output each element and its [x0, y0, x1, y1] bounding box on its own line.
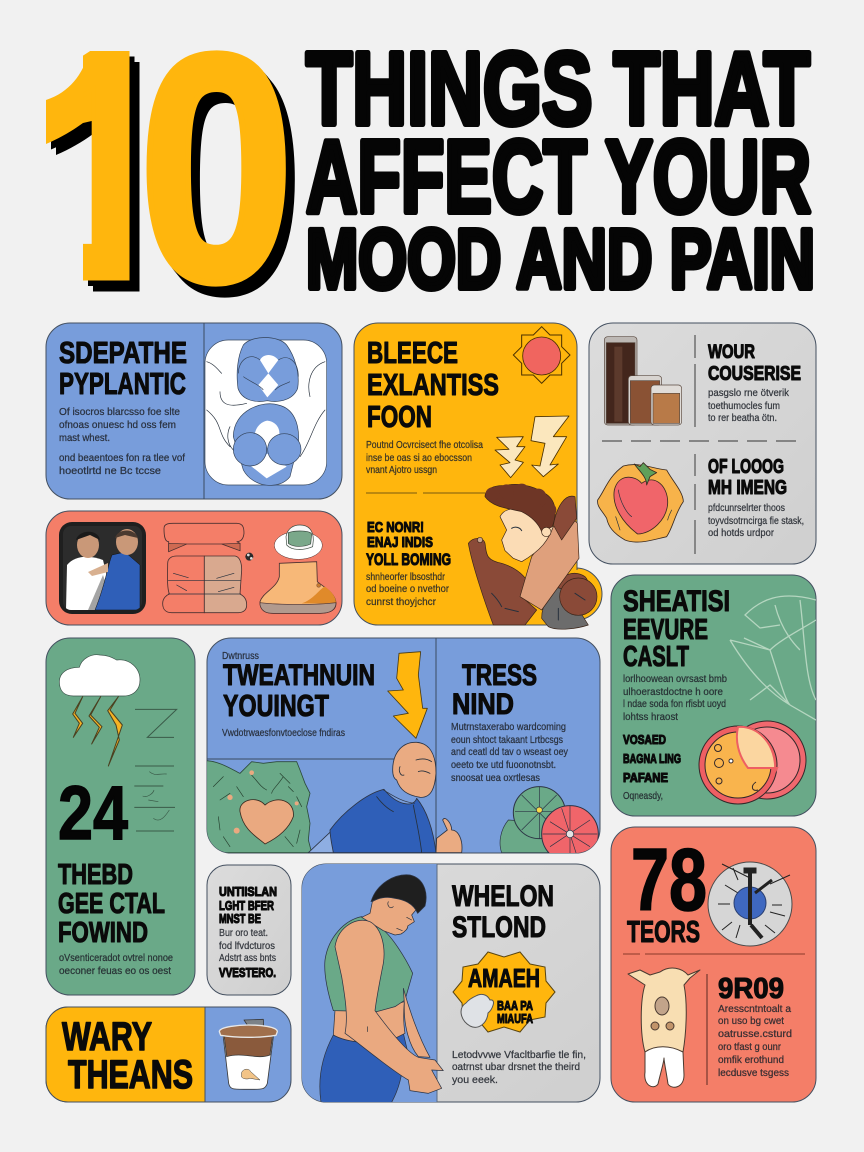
- body text: right: oeeto txe utd fuoonotnsbt.: [451, 760, 556, 771]
- number 78: 78: [631, 830, 707, 929]
- sub labels: Oqneasdy,: [623, 791, 663, 802]
- heading: left: TWEATHNUIN: [223, 659, 375, 692]
- body text: drinks: pasgslo rne ötverik: [708, 388, 790, 399]
- body text: hoeotlrtd ne Bc tccse: [59, 466, 161, 477]
- heading: [62, 1015, 193, 1097]
- body text: drinks: to rer beatha ötn.: [708, 413, 777, 424]
- panel: coral numbers: [611, 827, 816, 1102]
- note text: Adstrt ass bnts: [219, 953, 276, 964]
- heading: SHEATISI: [623, 585, 730, 618]
- body text: drinks: toethumocles fum: [708, 401, 780, 412]
- illustration: woman holding stomach: [320, 875, 443, 1102]
- heading: THEANS: [68, 1053, 193, 1097]
- body text: Poutnd Ocvrcisect fhe otcolisa: [366, 440, 483, 451]
- body text: right: [451, 722, 568, 784]
- sub labels: BAGNA LING: [623, 751, 681, 766]
- callout: burst with labels: AMAEH: [468, 963, 540, 993]
- note heading: MNST BE: [219, 911, 261, 926]
- illustration: citrus wheels: [500, 786, 599, 853]
- panel: sleep posture (blue): [46, 323, 342, 499]
- body text: [718, 1004, 792, 1079]
- note text: Bur oro teat.: [219, 928, 268, 939]
- body text: lohtss hraost: [623, 712, 678, 723]
- body text: [366, 440, 483, 476]
- body text: ond beaentoes fon ra tlee vof: [59, 453, 185, 464]
- title: [306, 31, 815, 306]
- heading: THEBD: [58, 859, 133, 891]
- illustration: sliced fruit circles: [699, 721, 806, 804]
- callout: burst with labels: BAA PA: [497, 998, 533, 1013]
- note text: [219, 928, 276, 980]
- icon: sketch lines: [134, 709, 177, 831]
- body text: Letodvvwe Vfacltbarfie tle fin,: [452, 1050, 586, 1061]
- body text: diet: od hotds urdpor: [708, 528, 775, 539]
- sub heading: YOLL BOMING: [366, 550, 451, 569]
- body text: vnant Ajotro ussgn: [366, 465, 437, 476]
- big number 10: 0: [147, 0, 303, 360]
- heading: 9R09: [718, 973, 784, 1005]
- sub body text: od boeine o nvethor: [366, 584, 450, 595]
- body text: right: and ceatl dd tav o wseast oey: [451, 747, 568, 758]
- panel: posture and stomach: [302, 864, 600, 1102]
- sub body text: cunrst thoyjchcr: [366, 597, 437, 608]
- icon: nerve dial: [708, 862, 792, 946]
- panel: center blue weather and stress: [207, 638, 600, 862]
- illustration: worried bald man: [308, 742, 462, 853]
- panel: grey small note: [207, 865, 291, 995]
- body text: you eeek.: [452, 1075, 498, 1086]
- body text: oVsenticeradot ovtrel nonoe: [59, 953, 173, 964]
- sub heading: [366, 519, 451, 569]
- body text: Aresscntntoalt a: [718, 1004, 791, 1015]
- illustration: bush with heart: [207, 761, 312, 853]
- panel: yellow food and energy: [354, 323, 602, 629]
- panel: green weather: [46, 638, 195, 995]
- heading: [452, 880, 554, 944]
- icon: hat and boot: [260, 525, 336, 613]
- sub body text: shnheorfer lbsosthdr: [366, 572, 446, 583]
- heading: diet: MH IMENG: [708, 477, 787, 499]
- body text: oatrusse.csturd: [718, 1029, 792, 1040]
- heading: BLEECE: [367, 335, 458, 370]
- body text: oeconer feuas eo os oest: [59, 966, 171, 977]
- callout: burst with labels: MIAUFA: [497, 1011, 533, 1026]
- heading: PYPLANTIC: [59, 366, 186, 401]
- body text: Of isocros blarcsso foe slte: [59, 407, 180, 418]
- body text: on uso bg cwet: [718, 1016, 784, 1027]
- body text: omfik erothund: [718, 1055, 784, 1066]
- heading: FOWIND: [58, 917, 148, 949]
- illustration: jars of drinks: [604, 337, 682, 425]
- body text: mast whest.: [59, 433, 110, 444]
- sub heading: ENAJ INDIS: [367, 534, 433, 551]
- body text: ulhoerastdoctne h oore: [623, 687, 723, 698]
- sub labels: [623, 732, 681, 802]
- icon: cloud creature: [461, 994, 494, 1027]
- label: TEORS: [627, 914, 700, 949]
- heading: right: TRESS: [462, 659, 537, 692]
- body text: [59, 953, 173, 977]
- heading: drinks: COUSERISE: [708, 363, 801, 385]
- body text: ofnoas onuesc hd oss fem: [59, 420, 176, 431]
- icon: cushions and seat: [163, 523, 253, 613]
- body text: [623, 674, 727, 723]
- panel: coral strip with photo and furniture: [46, 511, 342, 625]
- body text: diet: [708, 503, 804, 539]
- body text: [452, 1050, 586, 1086]
- panel: grey drinks and diet: [589, 323, 816, 564]
- heading: right: NIND: [452, 688, 514, 721]
- heading: drinks: WOUR: [708, 342, 755, 363]
- body text: oatrnst ubar drsnet the theird: [452, 1062, 580, 1073]
- big number 10: 0: [143, 0, 299, 354]
- sub heading: EC NONR!: [367, 519, 424, 536]
- illustration: sleeping figures from above: [205, 337, 327, 485]
- note heading: LGHT BFER: [219, 898, 274, 913]
- heading: SDEPATHE: [59, 335, 187, 370]
- icon: lightning arrow: [388, 652, 427, 738]
- callout: burst with labels: [453, 952, 555, 1032]
- illustration: back view figure: [628, 968, 700, 1087]
- icon: sun: [513, 327, 570, 383]
- heading: diet: [708, 456, 787, 499]
- note text: fod lfvdcturos: [219, 941, 275, 952]
- heading: EEVURE: [623, 614, 708, 646]
- heading: GEE CTAL: [58, 888, 165, 920]
- icon: cup of coffee: [219, 1019, 277, 1089]
- icon: storm cloud with lightning: [59, 655, 140, 766]
- body text: left: Vwdotrwaesfonvtoeclose fndiras: [222, 728, 345, 739]
- heading: FOON: [367, 399, 432, 434]
- heading: drinks: [708, 342, 801, 385]
- sub labels: PAFANE: [623, 770, 668, 785]
- heading: [623, 585, 730, 673]
- body text: lecdusve tsgess: [718, 1068, 789, 1079]
- heading: [58, 859, 165, 949]
- note heading: UNTIISLAN: [219, 884, 277, 899]
- panel: wary theans: [46, 1007, 291, 1102]
- note heading: [219, 884, 277, 926]
- heading: CASLT: [623, 641, 689, 673]
- big number 10: [46, 50, 295, 298]
- body text: l ndae soda fon rfisbt uoyd: [623, 699, 726, 710]
- body text: oro tfast g ounr: [718, 1042, 782, 1053]
- body text: lorlhoowean ovrsast bmb: [623, 674, 727, 685]
- icon: lightning bolts: [495, 416, 569, 478]
- heading: EXLANTISS: [367, 367, 499, 402]
- decorative leaf outline: [730, 596, 816, 720]
- heading: WHELON: [452, 880, 554, 913]
- heading: STLOND: [452, 911, 546, 944]
- illustration: man flexing with kettlebell: [468, 484, 597, 629]
- heading: right: [452, 659, 537, 721]
- sub labels: VOSAED: [623, 732, 666, 747]
- photo of two people: [59, 522, 146, 614]
- heading: left: [222, 651, 375, 723]
- body text: right: snoosat uea oxrtlesas: [451, 773, 540, 784]
- heading: [367, 335, 499, 434]
- sub body text: [366, 572, 450, 608]
- heading: WARY: [62, 1015, 152, 1059]
- icon: apple: [598, 463, 683, 542]
- note text: VVESTERO.: [219, 965, 276, 980]
- panel: green sugar and salt: [611, 575, 816, 816]
- number 24: 24: [58, 771, 128, 856]
- body text: [59, 407, 185, 477]
- body text: diet: pfdcunrselrter thoos: [708, 503, 785, 514]
- body text: inse be oas si ao ebocsson: [366, 453, 472, 464]
- heading: [59, 335, 187, 401]
- heading: left: Dwtnruss: [222, 651, 259, 662]
- body text: diet: toyvdsotrncirga fie stask,: [708, 516, 804, 527]
- body text: right: Mutrnstaxerabo wardcoming: [451, 722, 566, 733]
- body text: drinks: [708, 388, 790, 424]
- heading: left: YOUINGT: [223, 688, 329, 723]
- body text: right: eoun shtoct takaant Lrtbcsgs: [451, 735, 563, 746]
- heading: diet: OF LOOOG: [708, 456, 784, 478]
